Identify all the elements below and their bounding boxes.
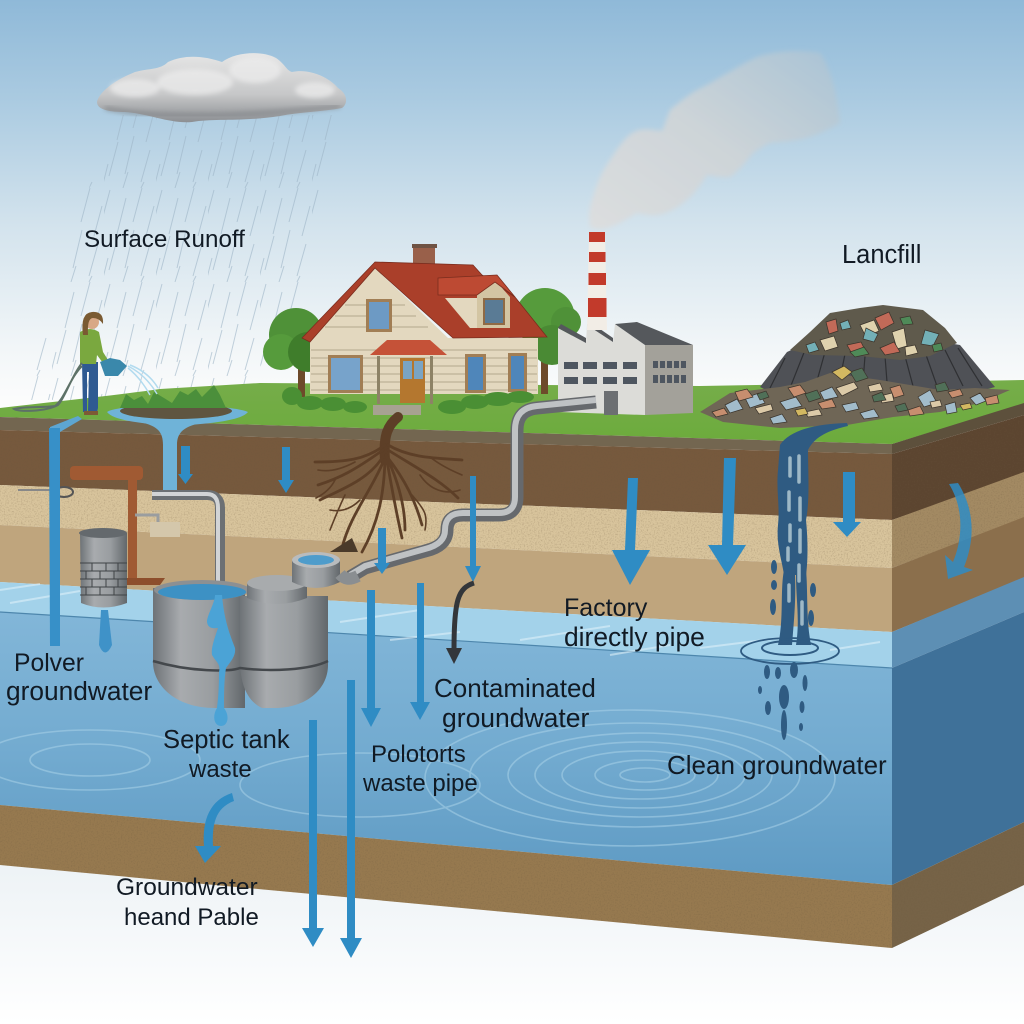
- label: Factory directly pipe: [564, 594, 705, 652]
- drip below well: [99, 610, 112, 652]
- shrubs: [282, 387, 534, 414]
- label: Contaminated groundwater: groundwater: [442, 703, 589, 733]
- smoke plume: [589, 51, 840, 229]
- label: Surface Runoff: Surface Runoff: [84, 226, 245, 253]
- soil grain texture: [0, 415, 1024, 948]
- water plume in tank: [207, 595, 235, 726]
- label: Septic tank waste: [163, 726, 290, 783]
- label: Polver groundwater: Polver: [14, 650, 84, 677]
- water table line: [0, 612, 892, 668]
- label: Groundwater head table: heand Pable: [124, 904, 259, 931]
- water stream from pond: [140, 422, 205, 490]
- water column left: [49, 428, 60, 646]
- landfill: [700, 305, 1010, 428]
- house: [302, 244, 547, 415]
- person with watering can: [14, 312, 158, 415]
- label: Septic tank waste: waste: [188, 756, 252, 783]
- label: Polver groundwater: [6, 650, 152, 706]
- tree roots: [315, 417, 462, 552]
- label: Polotorts waste pipe: waste pipe: [362, 770, 478, 797]
- front face: soil layers: [0, 417, 892, 948]
- factory: [558, 322, 693, 415]
- label: Polotorts waste pipe: [362, 741, 478, 797]
- septic tank: [153, 552, 340, 708]
- label: Polotorts waste pipe: Polotorts: [371, 741, 466, 768]
- pipe from factory: [350, 400, 596, 577]
- label: Contaminated groundwater: Contaminated: [434, 673, 596, 703]
- rain cloud: [97, 53, 346, 122]
- streaks in upper water band: [0, 584, 880, 655]
- blue seepage arrows: [178, 446, 973, 958]
- label: Factory directly pipe: directly pipe: [564, 622, 705, 652]
- well cover and post: [18, 466, 180, 585]
- tree behind house left: [263, 308, 328, 397]
- pipe outlet to tank: [340, 574, 358, 579]
- leachate stream: [741, 423, 848, 740]
- label: Clean groundwater: Clean groundwater: [667, 750, 887, 780]
- label: Contaminated groundwater: [434, 673, 596, 733]
- label: Groundwater head table: Groundwater: [116, 874, 258, 901]
- dark arrowhead: [446, 648, 462, 664]
- right face: soil layers: [892, 403, 1024, 948]
- label: Septic tank waste: Septic tank: [163, 726, 290, 754]
- groundwater ripples: [0, 710, 835, 846]
- root shadow: [330, 538, 358, 552]
- brick well: [79, 528, 127, 608]
- ground top surface: [0, 380, 1024, 444]
- label: Polver groundwater: groundwater: [6, 676, 152, 706]
- rain: [20, 110, 340, 405]
- label: Factory directly pipe: Factory: [564, 594, 648, 622]
- tree behind house right: [515, 288, 581, 394]
- chimney: [587, 232, 607, 330]
- label: Landfill: Lancfill: [842, 241, 921, 269]
- septic inlet pipe: [152, 494, 220, 590]
- vegetable garden pond: [107, 385, 248, 426]
- dark contaminated arrow: [454, 583, 474, 650]
- label: Groundwater head table: [116, 874, 259, 931]
- surface stream into water column: [50, 416, 82, 432]
